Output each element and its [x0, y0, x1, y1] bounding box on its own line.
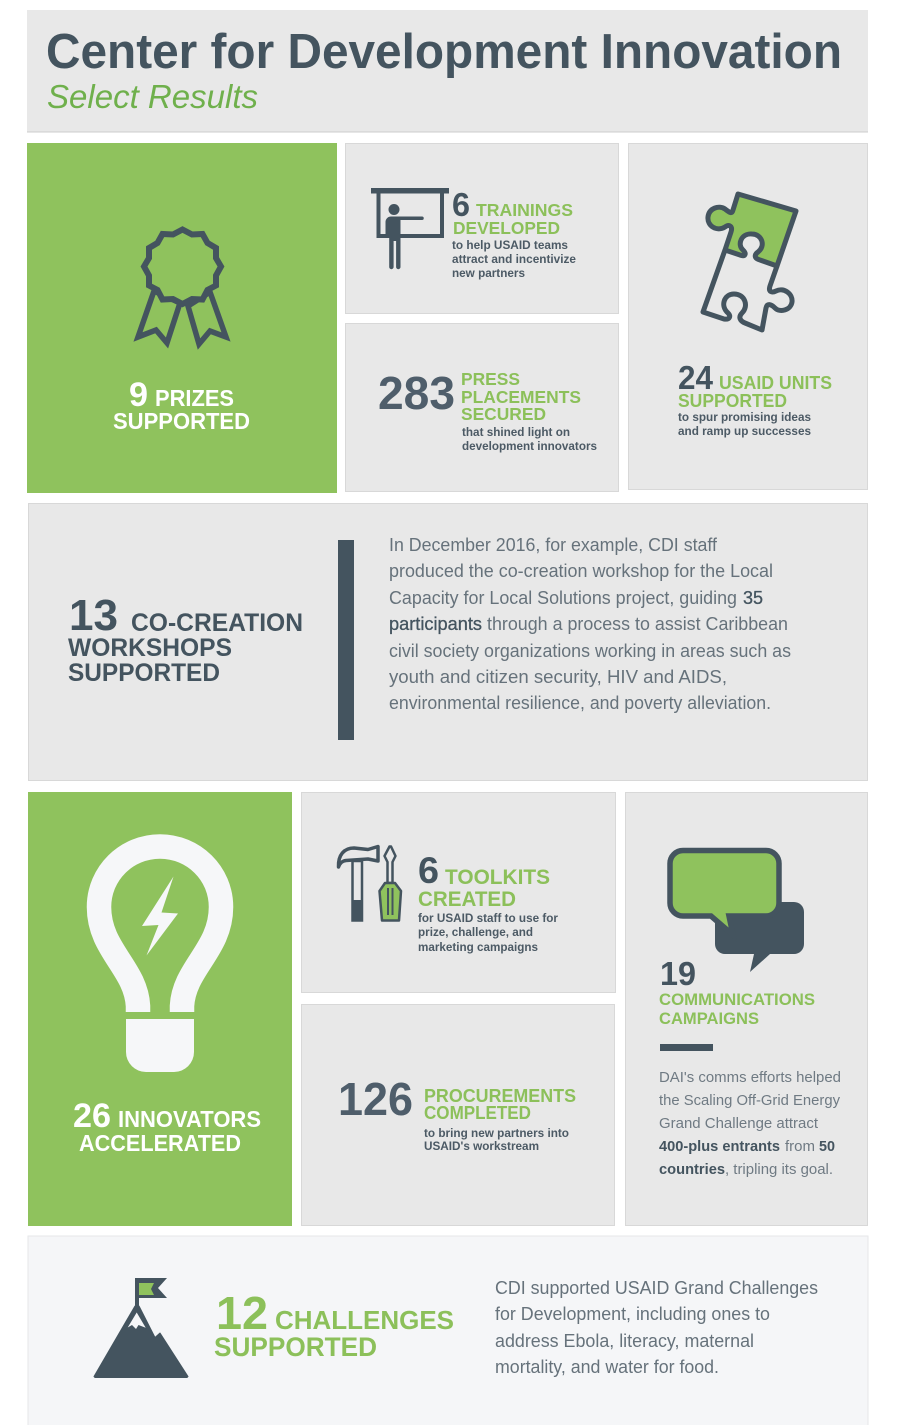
- icon: mountain with flag: [94, 1278, 188, 1378]
- workshops heading: CO-CREATION: [131, 609, 303, 637]
- prizes label: 9: [129, 376, 148, 414]
- workshops heading: [68, 591, 303, 687]
- communications paragraph: , tripling its goal.: [725, 1162, 833, 1178]
- workshops heading: WORKSHOPS: [68, 634, 232, 662]
- communications paragraph: 50: [819, 1139, 835, 1155]
- icon: hammer and screwdriver: [338, 846, 401, 921]
- communications paragraph: [659, 1070, 841, 1178]
- communications paragraph: the Scaling Off-Grid Energy: [659, 1093, 841, 1109]
- panel: trainings: [346, 144, 618, 314]
- workshops heading: 13: [69, 591, 118, 640]
- challenges paragraph: address Ebola, literacy, maternal: [495, 1331, 754, 1351]
- challenges heading: CHALLENGES: [275, 1305, 454, 1335]
- units text: USAID UNITS: [719, 373, 832, 393]
- workshop paragraph: through a process to assist Caribbean: [487, 614, 788, 634]
- icon: award ribbon: [138, 230, 226, 344]
- trainings text: attract and incentivize: [452, 252, 576, 266]
- title: Center for Development Innovation: [46, 25, 842, 79]
- toolkits text: for USAID staff to use for: [418, 911, 558, 925]
- workshop paragraph: In December 2016, for example, CDI staff: [389, 535, 718, 555]
- units text: 24: [678, 359, 714, 396]
- challenges paragraph: mortality, and water for food.: [495, 1357, 719, 1377]
- procurements text: to bring new partners into: [424, 1126, 569, 1140]
- prizes label: [113, 376, 250, 434]
- communications paragraph: countries: [659, 1162, 725, 1178]
- challenges heading: SUPPORTED: [214, 1332, 377, 1362]
- innovators label: 26: [73, 1097, 111, 1135]
- procurements text: [338, 1073, 576, 1153]
- communications paragraph: from: [785, 1139, 815, 1155]
- icon: puzzle pieces: [703, 194, 796, 330]
- workshops heading: SUPPORTED: [68, 659, 220, 687]
- panel: co-creation workshops: [28, 504, 868, 780]
- toolkits text: 6: [418, 850, 439, 891]
- press text: 283: [378, 367, 455, 419]
- innovators label: INNOVATORS: [118, 1106, 261, 1132]
- panel: USAID units: [628, 144, 868, 490]
- trainings text: new partners: [452, 266, 525, 280]
- press text: [378, 367, 597, 453]
- prizes label: SUPPORTED: [113, 408, 250, 434]
- press text: SECURED: [461, 404, 546, 424]
- communications paragraph: DAI's comms efforts helped: [659, 1070, 841, 1086]
- toolkits text: prize, challenge, and: [418, 925, 533, 939]
- subtitle: Select Results: [47, 79, 258, 116]
- challenges heading: [214, 1287, 454, 1362]
- panel: communications: [626, 792, 868, 1226]
- units text: [678, 359, 832, 438]
- challenges paragraph: CDI supported USAID Grand Challenges: [495, 1278, 818, 1298]
- communications paragraph: Grand Challenge attract: [659, 1116, 818, 1132]
- communications text: 19: [660, 955, 696, 992]
- units text: SUPPORTED: [678, 391, 787, 411]
- panel: press placements: [346, 324, 618, 492]
- workshop paragraph: youth and citizen security, HIV and AIDS,: [389, 667, 727, 687]
- icon: light bulb: [99, 846, 221, 1072]
- challenges paragraph: [495, 1278, 818, 1377]
- header panel: [27, 10, 868, 132]
- trainings text: DEVELOPED: [453, 218, 560, 238]
- workshop paragraph: participants: [389, 614, 482, 634]
- procurements text: PROCUREMENTS: [424, 1086, 576, 1106]
- toolkits text: [418, 850, 558, 954]
- panel: prizes: [27, 143, 337, 493]
- challenges heading: 12: [216, 1287, 268, 1339]
- workshop paragraph: environmental resilience, and poverty alleviation.: [389, 693, 771, 713]
- press text: PRESS: [461, 369, 520, 389]
- panel: challenges: [28, 1236, 868, 1425]
- workshop paragraph: produced the co-creation workshop for the Local: [389, 561, 773, 581]
- short rule: [660, 1044, 713, 1051]
- press text: PLACEMENTS: [461, 387, 581, 407]
- communications paragraph: 400-plus entrants: [659, 1139, 780, 1155]
- procurements text: COMPLETED: [424, 1103, 531, 1123]
- units text: and ramp up successes: [678, 424, 811, 438]
- panel: innovators: [28, 792, 292, 1226]
- communications text: [659, 955, 815, 1028]
- icon: speech bubbles: [670, 850, 804, 972]
- toolkits text: marketing campaigns: [418, 940, 538, 954]
- innovators label: [73, 1097, 261, 1156]
- units text: to spur promising ideas: [678, 410, 811, 424]
- icon: trainer at board: [371, 188, 449, 269]
- toolkits text: CREATED: [418, 888, 516, 911]
- trainings text: [452, 186, 576, 280]
- trainings text: TRAININGS: [476, 200, 573, 220]
- workshop paragraph: Capacity for Local Solutions project, guiding: [389, 588, 737, 608]
- procurements text: USAID's workstream: [424, 1139, 539, 1153]
- procurements text: 126: [338, 1073, 413, 1125]
- press text: that shined light on: [462, 425, 570, 439]
- press text: development innovators: [462, 439, 597, 453]
- panel: toolkits: [302, 792, 616, 992]
- challenges paragraph: for Development, including ones to: [495, 1304, 770, 1324]
- vertical bar: [338, 540, 354, 740]
- communications text: COMMUNICATIONS: [659, 990, 815, 1009]
- workshop paragraph: [389, 535, 791, 713]
- panel: procurements: [302, 1004, 614, 1226]
- toolkits text: TOOLKITS: [445, 866, 550, 889]
- workshop paragraph: 35: [743, 588, 763, 608]
- trainings text: 6: [452, 186, 470, 223]
- workshop paragraph: civil society organizations working in areas such as: [389, 641, 791, 661]
- communications text: CAMPAIGNS: [659, 1009, 759, 1028]
- trainings text: to help USAID teams: [452, 238, 568, 252]
- innovators label: ACCELERATED: [79, 1130, 241, 1156]
- prizes label: PRIZES: [155, 385, 234, 411]
